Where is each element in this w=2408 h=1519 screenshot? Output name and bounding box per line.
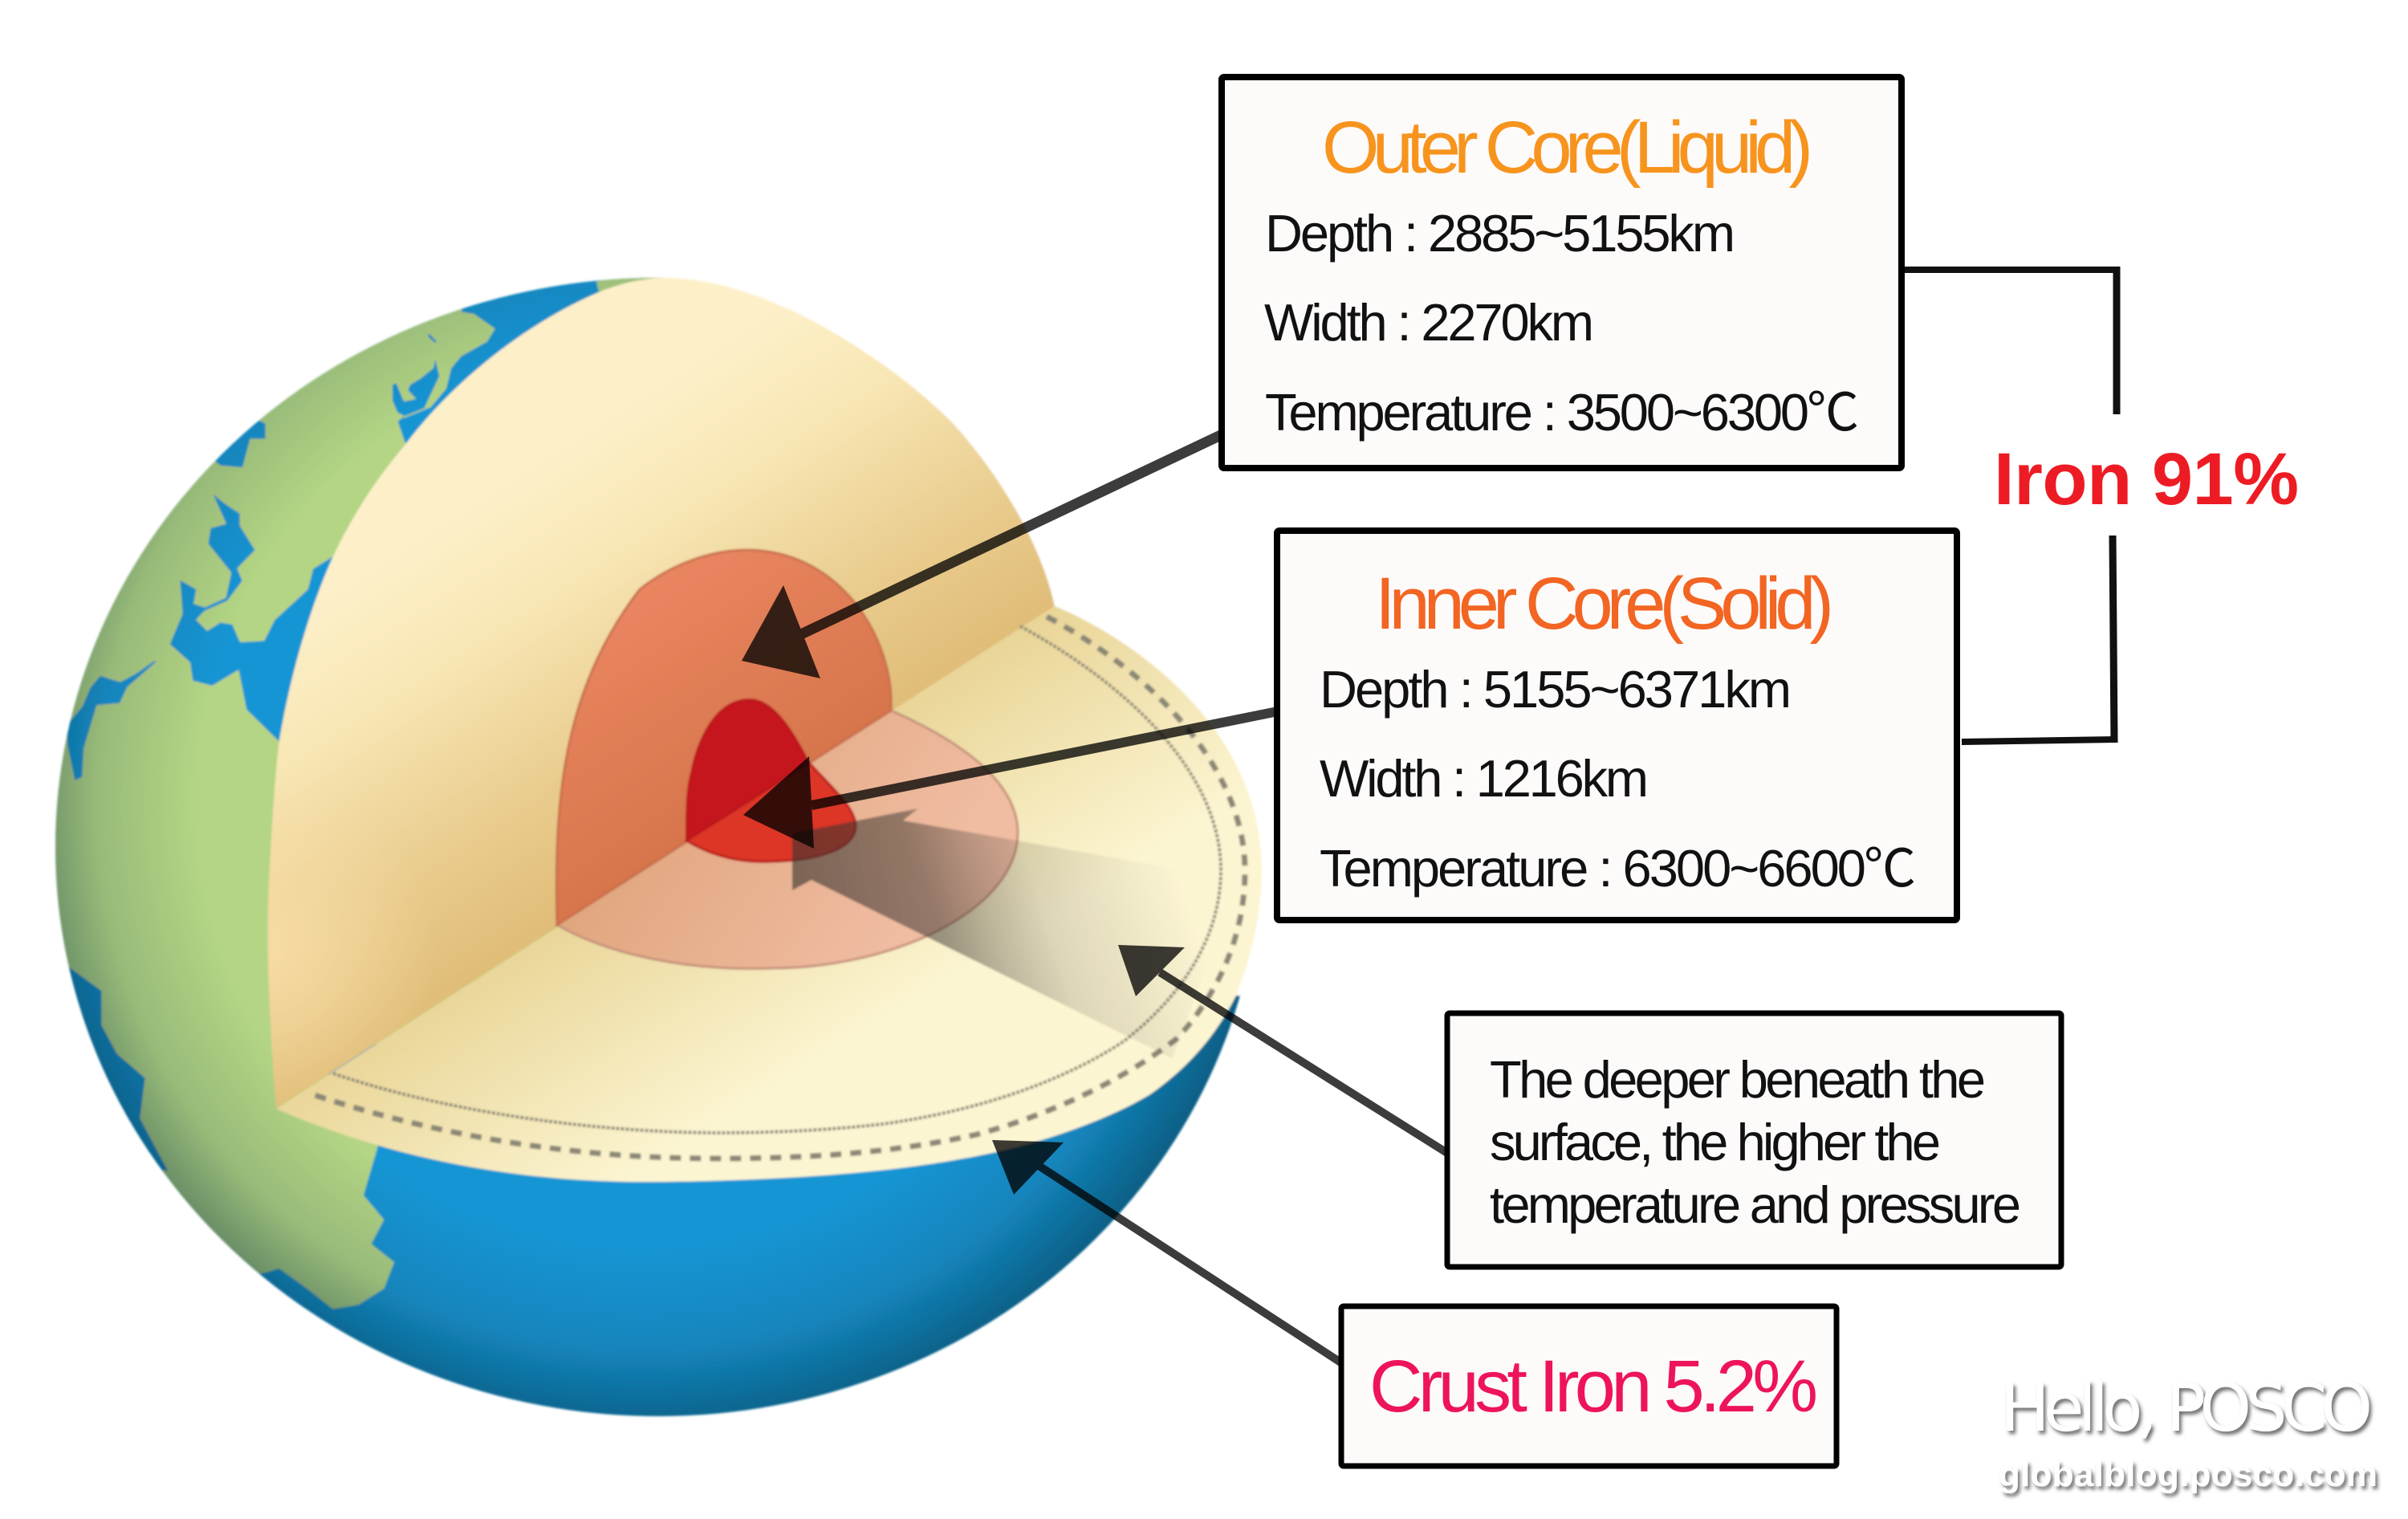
heading: outer core: Outer Core(Liquid) bbox=[1322, 107, 1813, 189]
outer core wall bbox=[556, 550, 891, 925]
label: Iron 91%: Iron 91% bbox=[1994, 438, 2299, 520]
watermark: Hello, POSCO: Hello, POSCO bbox=[2000, 1370, 2373, 1447]
width: Width : 2270km bbox=[1264, 293, 1594, 352]
arrow to inner core bbox=[743, 711, 1278, 849]
crust boundary dashed line bbox=[312, 617, 1245, 1159]
inner core wall bbox=[686, 699, 809, 841]
note line 3: temperature and pressure bbox=[1490, 1175, 2021, 1234]
shadow wedge of depth arrow bbox=[792, 808, 1240, 1058]
depth: Depth : 5155~6371km bbox=[1320, 660, 1792, 719]
inner core floor bbox=[686, 763, 856, 861]
bracket: iron share bbox=[1903, 267, 2117, 743]
crust iron label: Crust Iron 5.2% bbox=[1369, 1346, 1818, 1427]
temperature: Temperature : 6300~6600℃ bbox=[1320, 839, 1916, 898]
panel: outer core bbox=[1222, 77, 1902, 468]
arrow to outer core bbox=[742, 434, 1224, 678]
width: Width : 1216km bbox=[1320, 749, 1649, 808]
watermark bbox=[1999, 1370, 2377, 1494]
note line 1: The deeper beneath the bbox=[1490, 1050, 1986, 1109]
depth: Depth : 2885~5155km bbox=[1265, 204, 1735, 263]
outer core floor bbox=[557, 711, 1018, 969]
crust wall bbox=[268, 278, 1055, 1108]
panel: depth note bbox=[1447, 1013, 2061, 1267]
globe with cut-away bbox=[54, 276, 1263, 1418]
arrow to crust bbox=[992, 1140, 1347, 1366]
crust and mantle floor bbox=[276, 606, 1262, 1182]
heading: inner core: Inner Core(Solid) bbox=[1375, 563, 1834, 645]
watermark: url: globalblog.posco.com bbox=[1999, 1455, 2377, 1494]
temperature: Temperature : 3500~6300℃ bbox=[1265, 383, 1859, 442]
panel: inner core bbox=[1277, 531, 1957, 920]
note line 2: surface, the higher the bbox=[1490, 1113, 1941, 1171]
globe surface: ocean and continents bbox=[0, 241, 1268, 1421]
panel: crust iron bbox=[1341, 1306, 1837, 1466]
crust boundary thin line bbox=[333, 626, 1221, 1133]
arrow to mantle bbox=[1118, 945, 1450, 1155]
